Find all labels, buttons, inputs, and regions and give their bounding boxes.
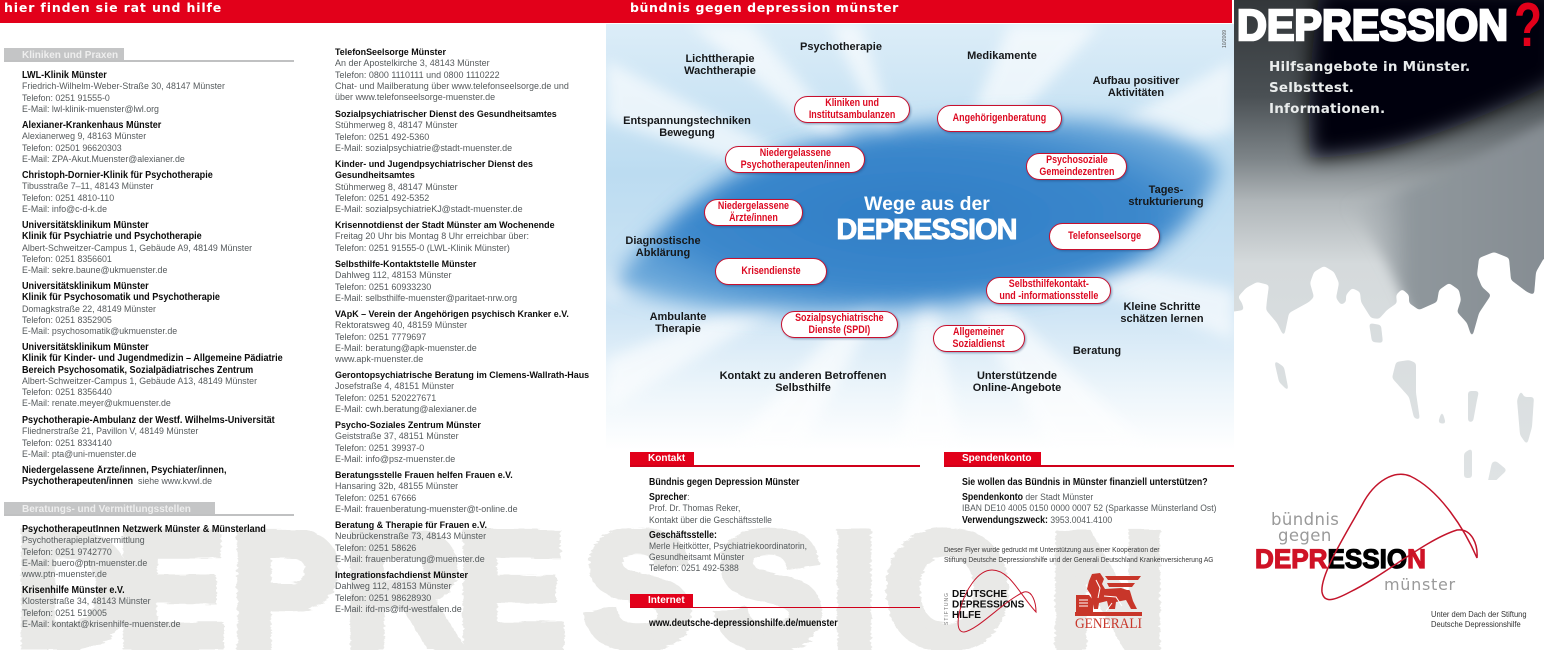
label: Abklärung [636,247,690,259]
logo: Stiftung Deutsche Depressionshilfe: STIFTUNG [944,592,950,625]
entry: E-Mail: sekre.baune@ukmuenster.de [22,265,167,276]
contact text: Sprecher: [649,492,689,503]
label: Medikamente [967,50,1037,62]
section heading: Internet: Internet [648,595,685,606]
entry: Telefon: 0251 60933230 [335,282,431,292]
red curve [1322,474,1477,600]
pill [794,96,910,123]
entry: Telefon: 0800 1110111 und 0800 1110222 [335,70,500,80]
label: Beratung [1073,345,1121,357]
entry: E-Mail: frauenberatung@muenster.de [335,554,485,565]
pill: Psychosoziale [1046,154,1107,166]
label [1092,75,1180,99]
entry: Telefon: 0251 8334140 [22,438,112,448]
entry: E-Mail: ifd-ms@ifd-westfalen.de [335,604,462,615]
cover title [1236,2,1544,52]
label: Online-Angebote [973,382,1061,394]
entry: Gesundheitsamtes [335,170,415,181]
entry: Beratung & Therapie für Frauen e.V. [335,520,487,531]
entry: E-Mail: sozialpsychiatrieKJ@stadt-muenster.de [335,204,523,215]
label: Bewegung [659,127,715,139]
donation text [962,477,1216,526]
pill: Sozialdienst [953,338,1005,350]
entry: E-Mail: renate.meyer@ukmuenster.de [22,398,171,409]
entry: Dahlweg 112, 48153 Münster [335,270,452,281]
cover subtitle [1269,57,1470,120]
entry [22,415,275,460]
entry [335,420,481,465]
label [1128,184,1204,208]
entry: Alexianerweg 9, 48163 Münster [22,131,146,142]
entry: Friedrich-Wilhelm-Weber-Straße 30, 48147 Münster [22,81,225,92]
entry: E-Mail: cwh.beratung@alexianer.de [335,404,477,415]
entry: E-Mail: lwl-klinik-muenster@lwl.org [22,104,159,115]
entry: Gerontopsychiatrische Beratung im Clemens-Wallrath-Haus [335,370,589,381]
entry: Alexianer-Krankenhaus Münster [22,120,161,131]
pill group: support services [704,96,1162,354]
pill: Telefonseelsorge [1068,230,1141,242]
central blue lens [612,118,1220,312]
entry: E-Mail: beratung@apk-muenster.de [335,343,477,354]
entry: TelefonSeelsorge Münster [335,47,446,58]
label: Kleine Schritte [1123,301,1201,313]
label: Kontakt zu anderen Betroffenen [720,370,886,382]
pill: Psychotherapeuten/innen [740,158,850,170]
label: Therapie [655,323,701,335]
entry: Universitätsklinikum Münster [22,220,149,231]
logo: Stiftung Deutsche Depressionshilfe: DEPRESSIONS [952,600,1025,610]
entry: E-Mail: sozialpsychiatrie@stadt-muenster.de [335,143,512,154]
address list: Kliniken und Praxen [22,70,283,487]
entry [335,470,518,515]
contact text: Prof. Dr. Thomas Reker, [649,503,740,514]
logo text: bündnis [1271,510,1339,529]
entry: Telefon: 0251 58626 [335,542,416,554]
sponsor note: Stiftung Deutsche Depressionshilfe und der Generali Deutschland Krankenversicherung AG [944,557,1213,564]
entry: Albert-Schweitzer-Campus 1, Gebäude A13, 48149 Münster [22,376,257,387]
entry: An der Apostelkirche 3, 48143 Münster [335,58,490,69]
label [973,370,1061,394]
label: strukturierung [1128,196,1204,208]
cover subtitle: Informationen. [1269,101,1385,117]
entry [22,342,283,409]
contact text: Bündnis gegen Depression Münster [649,477,799,488]
section heading: Kliniken und Praxen: Kliniken und Praxen [22,50,118,61]
pill: und -informationsstelle [999,290,1098,302]
label [720,370,886,394]
section heading: Spendenkonto: Spendenkonto [962,453,1031,464]
entry: Krisenhilfe Münster e.V. [22,585,125,596]
header left text: hier finden sie rat und hilfe [4,0,222,15]
section heading: Beratungs- und Vermittlungsstellen: Beratungs- und Vermittlungsstellen [22,504,191,515]
logo: Generali [1070,568,1148,634]
label: Psychotherapie [800,41,882,53]
entry: Chat- und Mailberatung über www.telefonseelsorge.de und [335,81,569,92]
sponsor note [944,546,1213,566]
entry [22,465,226,487]
pill: Angehörigenberatung [953,112,1046,124]
entry: Telefon: 0251 520227671 [335,392,436,404]
logo: Stiftung Deutsche Depressionshilfe: DEUTSCHE [952,589,1007,600]
entry: Telefon: 0251 4810-110 [22,192,114,204]
pill [986,277,1111,304]
grey right sweep [1345,115,1544,350]
label: Ambulante [650,311,706,323]
silhouettes of people [1224,252,1544,650]
entry: E-Mail: selbsthilfe-muenster@paritaet-nrw.org [335,293,517,304]
dark sweep [1309,0,1544,158]
entry: E-Mail: frauenberatung-muenster@t-online.de [335,504,518,515]
heading line 2: DEPRESSION [836,214,1017,246]
donation text: IBAN DE10 4005 0150 0000 0007 52 (Sparkasse Münsterland Ost) [962,503,1216,514]
heading: Wege aus der Depression [836,193,1017,246]
section heading: Kliniken und Praxen [4,48,124,62]
pill: Niedergelassene [718,200,789,212]
entry: E-Mail: ZPA-Akut.Muenster@alexianer.de [22,154,185,165]
entry: Telefon: 0251 7779697 [335,332,426,342]
entry: Telefon: 0251 8356601 [22,254,112,265]
entry: Geiststraße 37, 48151 Münster [335,431,459,442]
contact text: Merle Heitkötter, Psychiatriekoordinatorin, [649,541,807,552]
entry: Sozialpsychiatrischer Dienst des Gesundheitsamtes [335,109,557,120]
entry: Telefon: 0251 91555-0 [22,92,110,104]
entry: Telefon: 0251 67666 [335,492,416,504]
address list: Beratungs- und Vermittlungsstellen [22,524,266,630]
entry: Stühmerweg 8, 48147 Münster [335,182,458,192]
donation text: Spendenkonto der Stadt Münster [962,492,1093,503]
label: schätzen lernen [1120,313,1204,325]
entry: Telefon: 0251 8356440 [22,387,112,398]
pill [933,325,1025,352]
title word: DEPRESSION [1237,2,1508,50]
entry: Hansaring 32b, 48155 Münster [335,481,458,492]
entry [335,309,569,365]
entry: Psychotherapeuten/innen siehe www.kvwl.de [22,476,212,487]
entry: Telefon: 02501 96620303 [22,142,122,154]
label group: ways out of depression [623,41,1204,394]
entry: Bereich Psychosomatik, Sozialpädiatrisches Zentrum [22,364,253,376]
pill [725,146,865,173]
entry: www.ptn-muenster.de [22,569,107,580]
pill: Krisendienste [741,265,801,277]
entry [335,220,555,254]
address list: middle column [335,47,589,615]
donation text: Sie wollen das Bündnis in Münster finanziell unterstützen? [962,477,1208,488]
entry: Telefon: 0251 8352905 [22,315,112,326]
cover subtitle: Selbsttest. [1269,80,1354,96]
section heading: Beratungs- und Vermittlungsstellen [4,502,215,516]
entry: Telefon: 0251 492-5360 [335,132,429,142]
entry [335,370,589,415]
entry: Telefon: 0251 9742770 [22,546,112,558]
entry: Telefon: 0251 492-5352 [335,193,429,204]
section heading: Kontakt: Kontakt [648,453,685,464]
entry [335,570,468,615]
section heading: Internet [630,594,693,608]
label: Aufbau positiver [1093,75,1179,87]
pill: Gemeindezentren [1039,166,1114,178]
cover subtitle: Hilfsangebote in Münster. [1269,59,1470,75]
logo caption: Unter dem Dach der Stiftung [1431,609,1527,619]
contact text: Telefon: 0251 492-5388 [649,563,739,574]
entry: Christoph-Dornier-Klinik für Psychotherapie [22,170,213,181]
entry: Beratungsstelle Frauen helfen Frauen e.V. [335,470,513,481]
label: Selbsthilfe [775,382,831,394]
label: Unterstützende [977,370,1057,382]
pill [937,105,1062,132]
entry: Neubrückenstraße 73, 48143 Münster [335,531,486,542]
entry [22,585,181,630]
contact text: Gesundheitsamt Münster [649,552,744,563]
pill: Sozialpsychiatrische [795,312,884,324]
label [625,235,701,259]
entry: Universitätsklinikum Münster [22,342,149,353]
entry [335,47,569,103]
entry: Fliednerstraße 21, Pavillon V, 48149 Münster [22,426,198,437]
entry: Selbsthilfe-Kontaktstelle Münster [335,259,476,270]
entry: Kinder- und Jugendpsychiatrischer Dienst des [335,159,533,170]
label [623,115,751,139]
entry [335,109,557,154]
entry: LWL-Klinik Münster [22,70,107,81]
logo: Bündnis gegen Depression Münster: gegen [1278,526,1332,545]
entry: E-Mail: info@c-d-k.de [22,204,107,215]
pill [1049,223,1160,250]
entry: Dahlweg 112, 48153 Münster [335,581,452,592]
entry: Telefon: 0251 39937-0 [335,442,424,454]
entry: Albert-Schweitzer-Campus 1, Gebäude A9, 48149 Münster [22,242,252,254]
entry: Klosterstraße 34, 48143 Münster [22,596,151,607]
entry: Telefon: 0251 91555-0 (LWL-Klinik Münster) [335,242,510,254]
entry: E-Mail: info@psz-muenster.de [335,454,455,465]
entry: Psychotherapieplatzvermittlung [22,535,145,546]
entry: Josefstraße 4, 48151 Münster [335,381,454,392]
entry [335,159,533,215]
entry: Psychotherapie-Ambulanz der Westf. Wilhelms-Universität [22,415,275,426]
sponsor note: Dieser Flyer wurde gedruckt mit Unterstützung aus einer Kooperation der [944,547,1160,554]
pill: Kliniken und [825,97,879,109]
contact text: Geschäftsstelle: [649,530,717,541]
entry: E-Mail: pta@uni-muenster.de [22,449,136,460]
panel: blue background with rays [606,24,1234,424]
logo: Bündnis gegen Depression Münster: DEPRESSION [1255,544,1426,574]
entry: E-Mail: buero@ptn-muenster.de [22,558,147,569]
section heading: Spendenkonto [944,452,1041,467]
wordmark: GENERALI [1075,616,1142,632]
entry: Tibusstraße 7–11, 48143 Münster [22,181,153,192]
entry: Freitag 20 Uhr bis Montag 8 Uhr erreichbar über: [335,231,529,242]
entry [335,520,487,565]
pill: Niedergelassene [759,147,831,159]
section heading: Kontakt [630,452,694,467]
entry: Psycho-Soziales Zentrum Münster [335,420,481,431]
pill: Selbsthilfekontakt- [1008,278,1089,290]
label: Wachtherapie [684,65,756,77]
pill: Allgemeiner [953,326,1005,338]
entry [22,220,252,276]
entry: Krisennotdienst der Stadt Münster am Wochenende [335,220,555,231]
label [650,311,706,335]
heading line 1: Wege aus der [864,193,990,215]
light rays [606,24,1234,450]
pill [715,258,827,285]
label [684,53,756,77]
entry: Stühmerweg 8, 48147 Münster [335,120,458,131]
panel: cover with grey gradient and silhouettes [1234,0,1544,650]
pill [781,311,898,338]
entry: über www.telefonseelsorge-muenster.de [335,92,495,103]
red header bar [0,0,1232,23]
entry: Klinik für Psychosomatik und Psychotherapie [22,292,220,303]
donation text: Verwendungszweck: 3953.0041.4100 [962,515,1112,526]
entry [22,120,185,165]
entry: Niedergelassene Ärzte/innen, Psychiater/innen, [22,465,226,476]
logo caption [1431,609,1527,629]
entry: Telefon: 0251 98628930 [335,592,431,604]
pill: Institutsambulanzen [809,108,895,120]
label: Aktivitäten [1108,87,1164,99]
entry: www.apk-muenster.de [335,354,423,365]
label: Diagnostische [625,235,701,247]
entry: Universitätsklinikum Münster [22,281,149,292]
logo caption: Deutsche Depressionshilfe [1431,619,1521,629]
logo: Stiftung Deutsche Depressionshilfe [942,566,1040,634]
logo: Stiftung Deutsche Depressionshilfe: HILFE [952,610,981,621]
pill [704,199,803,226]
entry: Klinik für Psychiatrie und Psychotherapie [22,231,202,242]
label: Entspannungstechniken [623,115,751,127]
entry: Integrationsfachdienst Münster [335,570,468,581]
entry [22,524,266,580]
print code: 10/2009 [1222,30,1228,48]
label: Lichttherapie [685,53,755,65]
entry [22,70,225,115]
contact text [649,477,807,574]
pill: Ärzte/innen [729,212,778,224]
label [1120,301,1204,325]
lion icon [1075,573,1142,616]
contact text: Kontakt über die Geschäftsstelle [649,515,772,526]
entry [22,170,213,215]
entry: PsychotherapeutInnen Netzwerk Münster & Münsterland [22,524,266,535]
entry: E-Mail: psychosomatik@ukmuenster.de [22,326,177,337]
entry [335,259,517,304]
entry: Klinik für Kinder- und Jugendmedizin – Allgemeine Pädiatrie [22,353,283,364]
internet address: www.deutsche-depressionshilfe.de/muenster [649,618,838,629]
header centre text: bündnis gegen depression münster [630,0,899,15]
logo: Bündnis gegen Depression Münster: münster [1384,575,1456,594]
entry: Telefon: 0251 519005 [22,608,107,618]
pill [1026,153,1127,180]
entry [22,281,220,337]
entry: E-Mail: kontakt@krisenhilfe-muenster.de [22,619,181,630]
entry: Domagkstraße 22, 48149 Münster [22,304,156,314]
label: Tages- [1149,184,1183,196]
pill: Dienste (SPDI) [809,324,870,336]
entry: VApK – Verein der Angehörigen psychisch Kranker e.V. [335,309,569,320]
logo: Bündnis gegen Depression Münster [1250,468,1490,603]
entry: Rektoratsweg 40, 48159 Münster [335,320,467,331]
